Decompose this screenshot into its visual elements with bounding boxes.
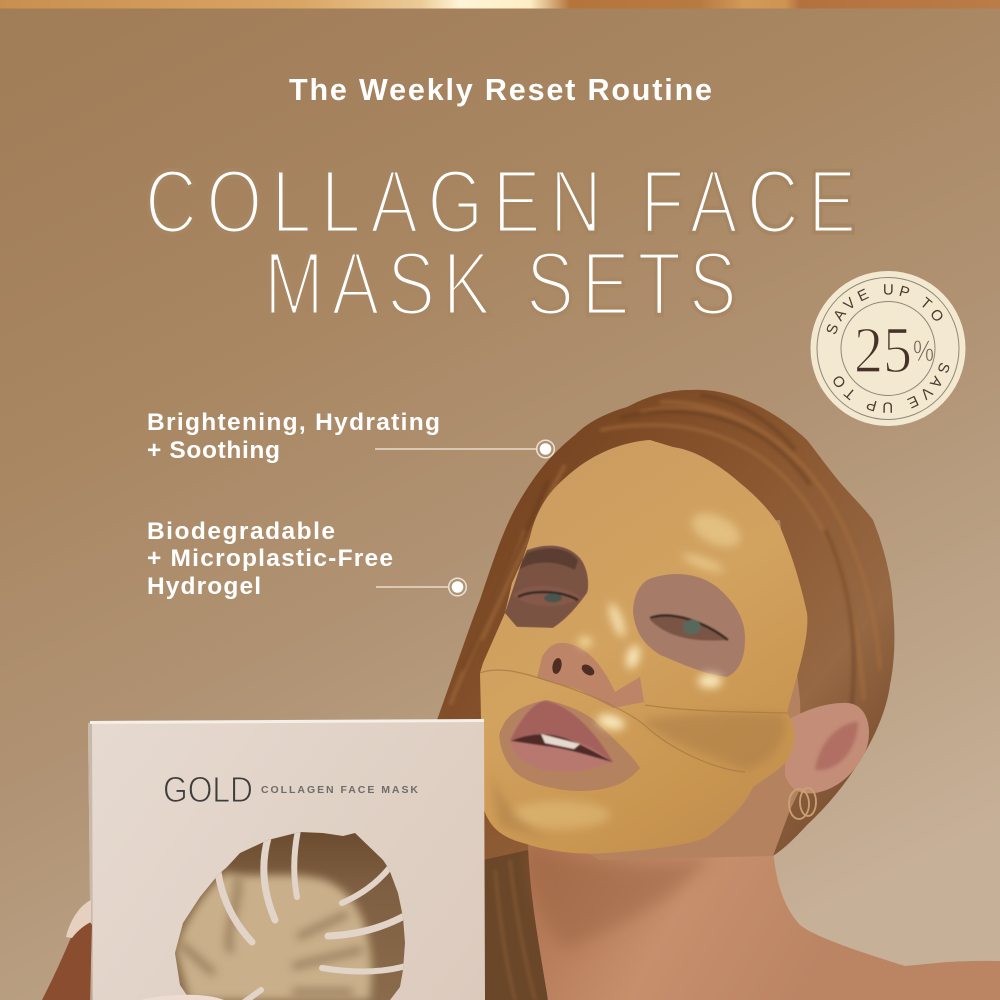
brand name: GOLD (163, 769, 253, 810)
leader line (375, 448, 537, 450)
ear (785, 703, 869, 793)
callout: brightening (147, 409, 554, 464)
thumb nail (140, 995, 224, 1000)
callout text: Biodegradable (147, 518, 335, 545)
product box (88, 719, 485, 1000)
product name: COLLAGEN FACE MASK (261, 784, 418, 796)
title (145, 152, 856, 334)
box side edge (88, 722, 93, 1000)
box top edge (90, 719, 484, 724)
badge rings (817, 278, 959, 420)
title line 1: COLLAGEN FACE (145, 152, 856, 252)
callout text: Brightening, Hydrating (147, 409, 440, 436)
leader line (376, 586, 449, 588)
hand holding box (42, 900, 224, 1000)
callout text (147, 518, 393, 600)
neck shadow (530, 850, 715, 950)
callout text: Hydrogel (147, 573, 261, 600)
discount value: 25 (854, 314, 912, 387)
fingernail (66, 900, 91, 938)
left eye area (505, 545, 588, 628)
leaf ribs (218, 830, 406, 1000)
marker dot (537, 440, 554, 458)
jaw and face skin under mask (490, 520, 802, 860)
ear inner shading (815, 722, 858, 770)
finger (42, 920, 92, 1000)
right eye area (633, 574, 745, 677)
lips (510, 701, 613, 771)
marker dot (449, 578, 466, 596)
nose (537, 643, 644, 708)
callout text: + Microplastic-Free (147, 545, 393, 572)
box face (88, 720, 485, 1000)
gold collagen mask (480, 440, 807, 854)
discount badge (810, 271, 966, 426)
model photo illustration (437, 390, 1000, 1000)
circular text top: SAVE UP TO (826, 284, 942, 334)
neck and shoulder (528, 845, 1000, 1000)
circular text bottom: SAVE UP TO (834, 362, 950, 413)
mask shadows (490, 713, 786, 840)
hair (437, 390, 894, 1000)
mask highlights (510, 506, 745, 829)
earrings (789, 788, 816, 819)
mask fold line (480, 670, 787, 772)
percent sign: % (913, 335, 934, 368)
callout: biodegradable (147, 518, 466, 600)
callout text: + Soothing (147, 437, 280, 464)
top gold image strip (0, 0, 1000, 8)
subtitle: The Weekly Reset Routine (289, 73, 712, 107)
window shadows (182, 880, 360, 992)
callout text (147, 409, 440, 464)
title line 2: MASK SETS (264, 234, 737, 334)
badge disc (810, 271, 966, 426)
monstera leaf cutout (170, 825, 410, 1000)
mask seen through window (176, 872, 372, 1000)
